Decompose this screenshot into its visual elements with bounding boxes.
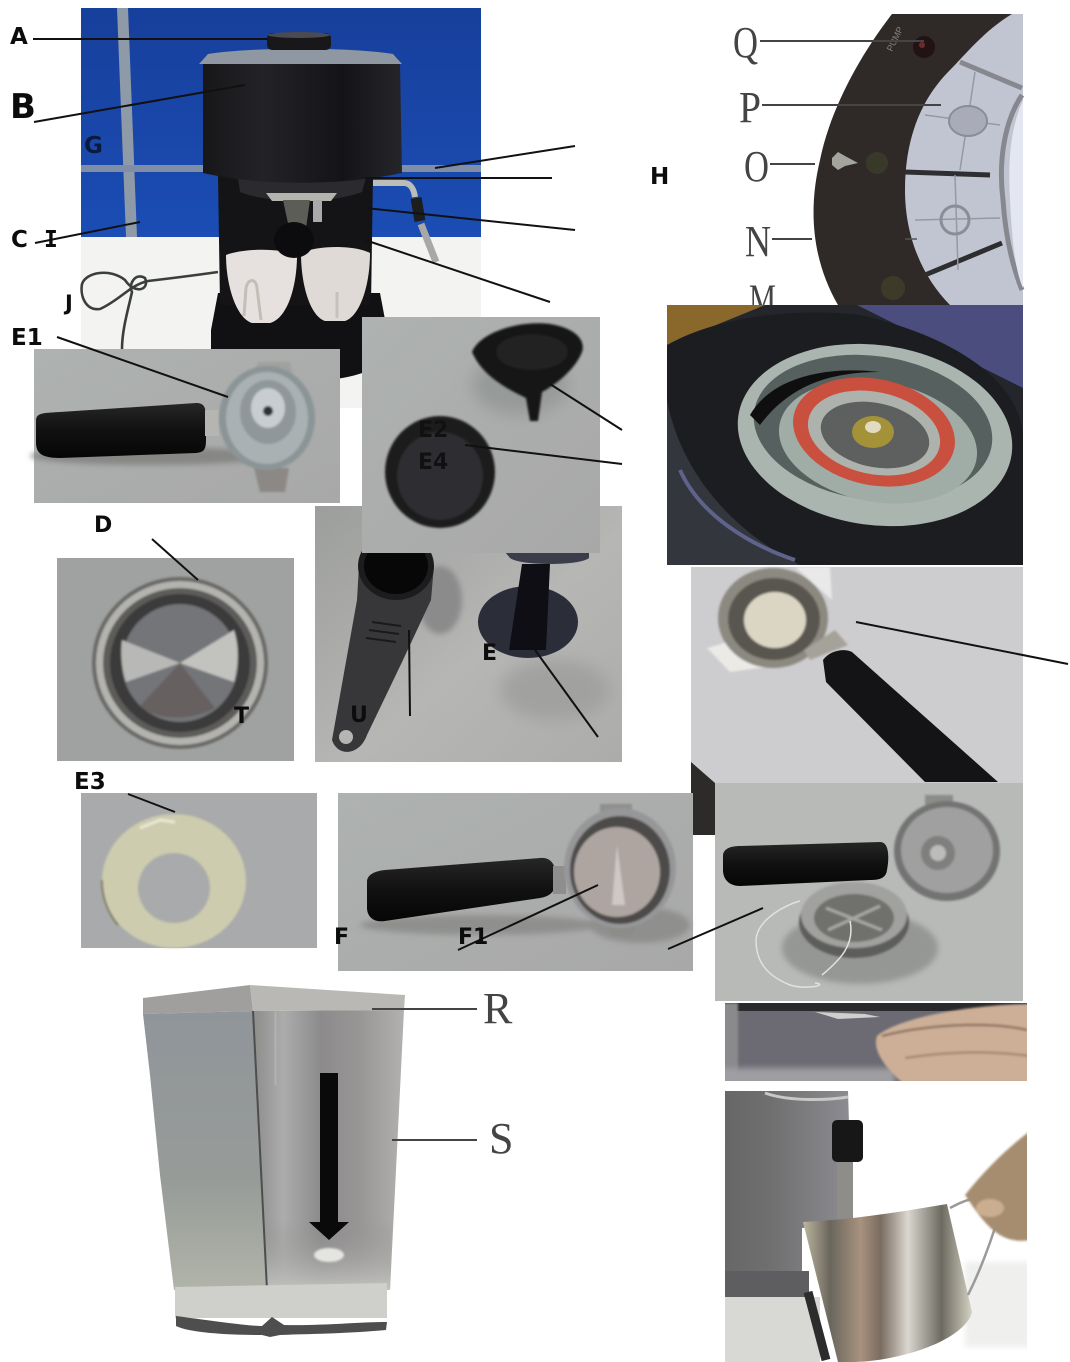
labels: bold part letters: D: [94, 513, 112, 538]
icon: steam wand: [373, 183, 436, 262]
labels: bold part letters: [10, 24, 669, 950]
labels: bold part letters: E3: [74, 769, 106, 795]
panel: portafilter F photo: [338, 793, 693, 971]
icon: left wall: [143, 1011, 267, 1290]
icon: handle: [36, 403, 206, 458]
labels: bold part letters: F1: [458, 925, 488, 950]
panel: milk frothing photo: [725, 1091, 1035, 1362]
icon: clear filter holder: [219, 362, 315, 492]
labels: bold part letters: G: [84, 133, 103, 159]
labels: serif part letters: O: [744, 142, 769, 191]
labels: bold part letters: H: [650, 164, 669, 190]
panel: silicone washer photo E3: [81, 793, 317, 948]
labels: serif part letters: [483, 18, 771, 1163]
icon: black handle: [823, 650, 998, 782]
icon: indicator lamps: [866, 36, 935, 300]
leader lines: [33, 39, 1068, 1140]
labels: bold part letters: E: [482, 641, 497, 666]
icon: red gasket: [783, 363, 965, 501]
labels: bold part letters: T: [234, 704, 249, 729]
labels: bold part letters: E4: [418, 450, 448, 475]
icon: jug spout shadow: [808, 1292, 826, 1360]
icon: funnel: [472, 323, 583, 421]
icon: coffee tamper: [478, 552, 589, 658]
panel: scoop and tamper photo: [315, 506, 622, 762]
panel: gasket and shower head photo: [667, 305, 1024, 565]
labels: bold part letters: B: [10, 87, 36, 127]
icon: basket: [799, 882, 909, 958]
icon: jug handle: [950, 1199, 1000, 1295]
labels: bold part letters: I: [44, 227, 58, 253]
icon: ring inner opening: [744, 340, 1002, 516]
icon: brew handle knob: [274, 222, 314, 258]
icon: round cap: [385, 416, 495, 528]
labels: bold part letters: E2: [418, 418, 448, 443]
icon: filter holder: [564, 804, 676, 936]
panel: disassembled portafilter photo: [715, 783, 1023, 1001]
icon: wire loop: [756, 901, 851, 987]
icon: base band: [175, 1283, 387, 1318]
labels: bold part letters: E1: [11, 325, 43, 351]
panel: filter basket photo D: [57, 558, 294, 761]
labels: serif part letters: Q: [733, 18, 758, 67]
labels: bold part letters: C: [11, 227, 28, 253]
labels: bold part letters: A: [10, 24, 28, 50]
icon: filter basket: [92, 577, 268, 749]
labels: bold part letters: F: [334, 925, 349, 950]
icon: hand: [965, 1131, 1030, 1241]
icon: dark crescent: [750, 370, 880, 425]
panel: brew funnel and cap photo: [362, 317, 600, 553]
labels: bold part letters: U: [350, 703, 368, 728]
labels: serif part letters: S: [489, 1114, 513, 1163]
icon: top front band: [250, 985, 405, 1011]
panel: hand on steam valve photo: [720, 1003, 1030, 1086]
panel: control dial photo: [814, 14, 1023, 305]
labels: serif part letters: R: [483, 984, 513, 1033]
panel: portafilter upper photo: [691, 567, 1023, 835]
icon: dial plate: [905, 14, 1023, 305]
icon: top band: [143, 985, 253, 1014]
panel: water tank photo: [143, 985, 405, 1337]
labels: serif part letters: P: [739, 83, 761, 132]
icon: measuring scoop: [332, 532, 434, 752]
icon: brass screw: [852, 416, 894, 448]
icon: group head: [238, 178, 366, 228]
icon: machine top black surround: [667, 313, 1023, 565]
icon: machine body: [218, 175, 373, 305]
icon: water level arrow: [309, 1073, 349, 1240]
icon: seat: [769, 366, 987, 518]
text: pump: PUMP: [885, 25, 905, 53]
icon: steel milk jug: [803, 1204, 972, 1362]
icon: washer ring: [102, 814, 246, 948]
icon: filter bowl: [707, 567, 848, 672]
labels: bold part letters: J: [63, 291, 73, 315]
icon: lid: [199, 49, 402, 64]
icon: handle: [367, 858, 556, 921]
icon: top knob: [267, 32, 331, 50]
icon: white cups: [226, 247, 370, 323]
icon: front wall: [253, 1010, 404, 1290]
panel: espresso machine photo: [81, 8, 481, 408]
labels: serif part letters: N: [745, 217, 771, 266]
icon: handle: [723, 842, 888, 886]
icon: base foot: [176, 1316, 387, 1337]
icon: steam nozzle: [832, 1120, 863, 1220]
icon: fingers: [876, 1004, 1030, 1085]
icon: steam symbol: [832, 152, 858, 170]
icon: metal ring: [726, 327, 1024, 543]
icon: holder disc: [894, 795, 1000, 901]
icon: boiler cylinder: [203, 63, 402, 183]
panel: portafilter E1 photo: [30, 349, 340, 503]
icon: machine base: [211, 293, 388, 382]
label: M: M: [749, 276, 776, 321]
icon: power cord: [82, 272, 218, 349]
